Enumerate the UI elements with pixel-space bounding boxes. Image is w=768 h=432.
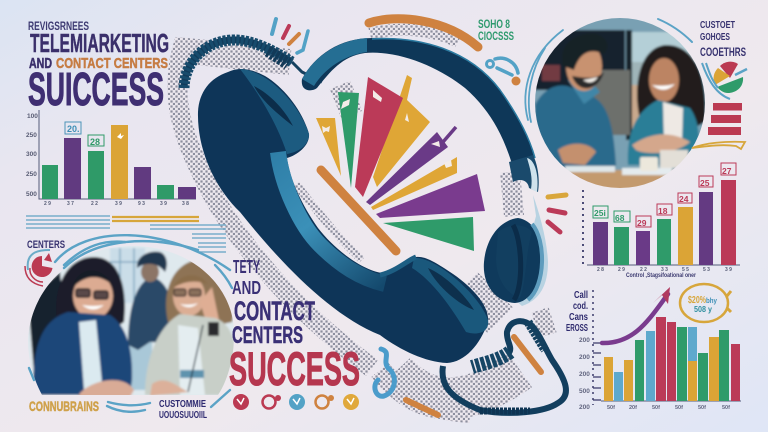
arcs around right photo <box>525 19 692 122</box>
arrow: growth <box>602 287 670 343</box>
label: call cost: EROSS <box>566 323 588 334</box>
bar chart: top right: 18 <box>658 206 668 216</box>
title block: CONTACT CENTERS <box>56 55 168 72</box>
icon row <box>233 394 359 410</box>
ribbon <box>692 142 745 149</box>
top cup <box>240 69 309 154</box>
label: call cost <box>566 290 588 334</box>
photo: two smiling women <box>28 246 234 395</box>
callout: ring with value: bhy <box>706 298 717 305</box>
bar chart: bottom right: 50f <box>675 405 683 411</box>
bar chart: bottom right: 200 <box>579 337 590 344</box>
title block: REVIGSRNEES <box>28 19 89 33</box>
bar chart: bottom right: 50f <box>722 405 730 411</box>
small ear cup <box>484 218 542 303</box>
bar chart: top right: 5 5 <box>682 267 689 273</box>
label: soho and process: CIOCSSS <box>478 29 514 43</box>
bar chart: top right <box>583 163 740 279</box>
headline: contact centers success <box>229 257 360 395</box>
bar chart: top right: 3 3 <box>661 267 668 273</box>
label: soho and process <box>478 17 514 43</box>
photo: man and woman at table <box>530 15 710 190</box>
bar chart: top left: 3 7 <box>67 201 74 207</box>
accent bars near cord <box>406 337 541 415</box>
label: call cost: Cans <box>569 312 588 323</box>
title block <box>28 19 169 115</box>
bar chart: top right: 27 <box>722 166 732 176</box>
bar chart: top right: Control ,Stagsifoational oner <box>626 272 696 279</box>
icon: blue squiggle <box>486 58 520 86</box>
bar chart: bottom right: 50f <box>698 405 706 411</box>
bar chart: top right: 25i <box>594 208 606 218</box>
accent marks near right ear cup <box>548 195 566 232</box>
label: soho and process: SOHO 8 <box>478 17 510 31</box>
top decorative marks <box>272 19 478 53</box>
headline: contact centers success: SUCCESS <box>229 342 360 395</box>
label: customer: CUSTOMMIE <box>159 399 206 410</box>
bar chart: top right: 3 9 <box>725 267 732 273</box>
icon: pie with arcs <box>25 250 52 286</box>
bar chart: top right: 2 9 <box>618 267 625 273</box>
arcs around left photo <box>29 235 232 412</box>
label: customer goals <box>700 20 746 59</box>
label: customer goals: GOHOES <box>700 32 730 43</box>
telephone handset with headband <box>184 38 566 413</box>
bar chart: top left: 3 9 <box>160 201 167 207</box>
bar chart: top right: 5 3 <box>703 267 710 273</box>
bar chart: bottom right: 50f <box>652 405 660 411</box>
label: centers: CENTERS <box>27 239 65 251</box>
icon: donut pie <box>702 62 747 99</box>
bar chart: top left: 2 9 <box>44 201 51 207</box>
label: customer: UOUOSUUOIIL <box>159 410 207 421</box>
headband slider <box>509 155 539 192</box>
bar chart: top right: 68 <box>615 213 625 223</box>
bar chart: top left: 9 3 <box>138 201 145 207</box>
bar chart: bottom right: 20f <box>629 405 637 411</box>
headline: contact centers success: AND <box>232 278 261 298</box>
headband <box>302 38 535 164</box>
bar chart: top left: 3 8 <box>182 201 189 207</box>
cord from ear cup to handset <box>442 321 566 413</box>
label: customer goals: CUSTOET <box>700 20 735 31</box>
bar chart: top left: 250 <box>26 171 37 178</box>
bar chart: top left: 100 <box>27 113 38 120</box>
headline: contact centers success: TETY <box>233 257 260 277</box>
label: customer goals: COOETHRS <box>700 45 746 59</box>
label: customer <box>159 399 207 421</box>
bar chart: bottom right: 200 <box>579 354 590 361</box>
label: call cost: Call <box>574 290 588 301</box>
bar chart: bottom right: 50f <box>607 405 615 411</box>
callout: ring with value: 508 y <box>694 305 712 314</box>
label bars <box>708 103 742 135</box>
bottom cup <box>412 258 488 334</box>
bar chart: top right: 25 <box>700 178 710 188</box>
icon: blue swirl arrow <box>375 349 394 396</box>
handset highlight <box>278 152 385 284</box>
bar chart: top left: 2 2 <box>91 201 98 207</box>
headline: contact centers success: CENTERS <box>232 322 303 349</box>
curly cord <box>184 40 322 88</box>
bar chart: top right: 2 2 <box>640 267 647 273</box>
headline: contact centers success: CONTACT <box>234 296 315 326</box>
callout: ring with value <box>680 284 731 322</box>
callout: ring with value: $20% <box>688 295 706 306</box>
bar chart: top right: 29 <box>637 218 647 228</box>
halftone dot bands <box>177 30 548 412</box>
bar chart: top left: 20. <box>67 124 80 134</box>
bar chart: bottom right: 200 <box>579 371 590 378</box>
bar chart: bottom right: 500 <box>579 388 590 395</box>
bar chart: top right: 24 <box>679 194 689 204</box>
bar chart: top left <box>26 110 196 207</box>
bar chart: top left: 300 <box>26 151 37 158</box>
decorative text lines <box>26 216 226 252</box>
bar chart: top left: 3 9 <box>115 201 122 207</box>
icon: fan chart <box>316 75 485 251</box>
label: communications: CONNUBRAINS <box>29 398 99 414</box>
bar chart: top left: 500 <box>26 191 37 198</box>
bar chart: top right: 2 8 <box>597 267 604 273</box>
title block: TELEMIARKETING <box>30 28 169 58</box>
bar chart: top left: 250 <box>26 132 37 139</box>
bar chart: bottom right <box>579 290 741 411</box>
label: call cost: cod. <box>573 301 588 312</box>
handset body <box>198 69 488 363</box>
title block: SUICCESS <box>28 63 164 115</box>
bar chart: bottom right: 200 <box>579 404 590 411</box>
title block: AND <box>29 55 52 72</box>
bar chart: top left: 28 <box>90 137 100 147</box>
